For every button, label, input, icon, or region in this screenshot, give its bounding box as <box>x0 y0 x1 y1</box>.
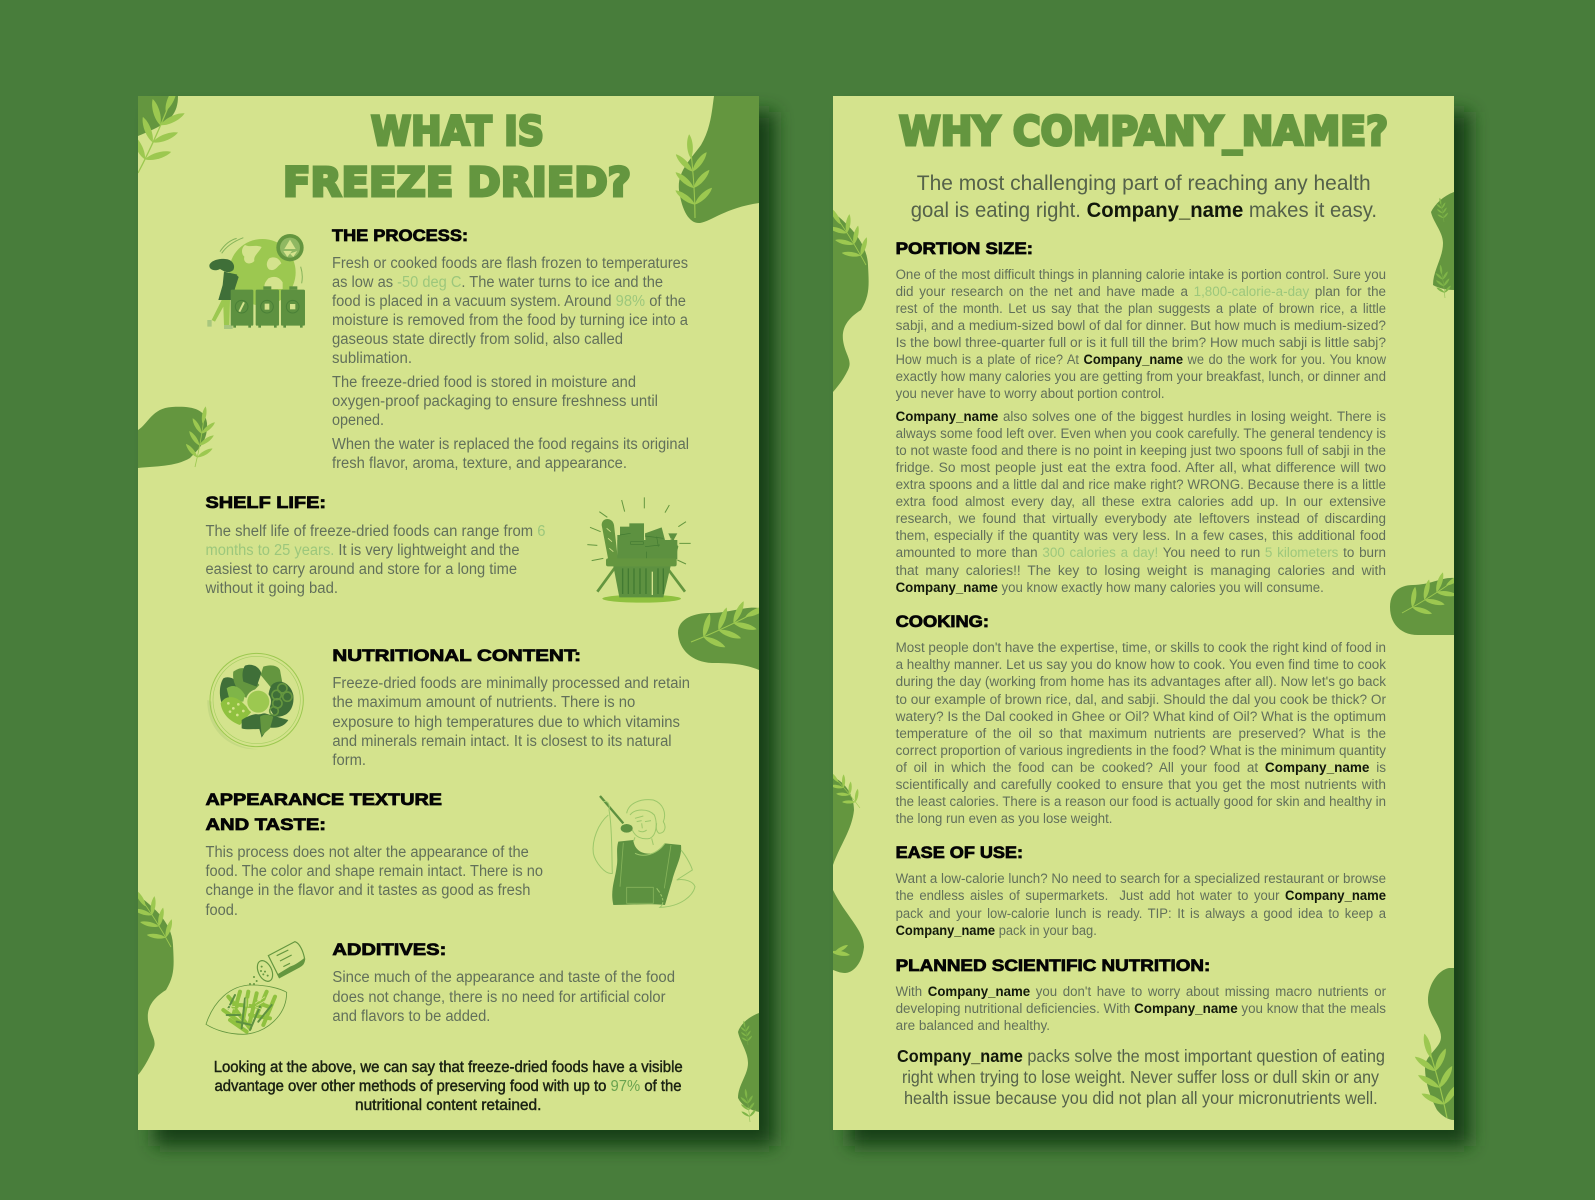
text block: nutritional content: form. <box>332 752 366 769</box>
heading: nutritional content: NUTRITIONAL CONTENT: <box>332 647 581 665</box>
text block: the process <box>332 255 689 472</box>
closing text: Company_name packs solve the most important question of eating <box>897 1046 1385 1066</box>
title: why company_name: WHY COMPANY_NAME? <box>899 109 1388 155</box>
text block: the process: food is placed in a vacuum system. Around 98% of the <box>332 293 686 310</box>
text block: nutritional content <box>332 675 690 769</box>
text block: portion size: How much is a plate of rice? At Company_name we do the work for you. You know <box>896 352 1386 367</box>
text block: ease of use: Want a low-calorie lunch? No need to search for a specialized restaurant or browse <box>896 871 1386 886</box>
heading: portion size: PORTION SIZE: <box>896 240 1033 258</box>
text block: the process: fresh flavor, aroma, texture, and appearance. <box>332 455 627 472</box>
heading: shelf life: SHELF LIFE: <box>206 494 326 512</box>
text block: portion size: always some food left over. Even when you cook carefully. The general tendency is <box>896 426 1386 441</box>
text block: the process: sublimation. <box>332 350 412 367</box>
text block: cooking: the long run even as you lose weight. <box>896 811 1112 826</box>
icon: grocery basket <box>587 497 691 603</box>
text block: additives: does not change, there is no need for artificial color <box>332 989 666 1006</box>
text block: appearance texture and taste: food. <box>206 902 238 919</box>
text block: planned scientific nutrition: developing nutritional deficiencies. With Company_name you know that the meals <box>896 1001 1386 1016</box>
text block: ease of use: pack and your low-calorie lunch is ready. TIP: It is always a good idea to keep a <box>896 906 1386 921</box>
icon: woman tasting from a ladle <box>593 796 695 907</box>
decorative blobs and leaves, right panel <box>817 192 1473 1123</box>
text block: portion size: did your research on the net and have made a 1,800-calorie-a-day plan for the <box>896 284 1386 299</box>
icon: salt shaker over a bowl of beans <box>206 942 305 1034</box>
text block: cooking: of oil in which the food can be cooked? All your food at Company_name is <box>896 760 1386 775</box>
text block: the process: The freeze-dried food is stored in moisture and <box>332 374 636 391</box>
decorative blobs and leaves, left panel <box>118 77 776 1123</box>
text block: portion size: you never have to worry about portion control. <box>896 386 1165 401</box>
text block: appearance texture and taste: This process does not alter the appearance of the <box>206 844 529 861</box>
heading: ease of use: EASE OF USE: <box>896 844 1023 862</box>
heading: the process: THE PROCESS: <box>332 227 468 245</box>
text block: planned scientific nutrition <box>896 984 1386 1033</box>
infographic canvas <box>138 96 1480 1156</box>
heading: appearance texture and taste <box>206 791 442 834</box>
text block: cooking: scientifically and carefully cooked to ensure that you get the most nutrients with <box>896 777 1386 792</box>
closing text <box>897 1046 1385 1108</box>
text block: portion size: extra spoons and a little dal and rice make right? WRONG. Because there is a little <box>896 477 1386 492</box>
text block: shelf life: easiest to carry around and store for a long time <box>206 561 517 578</box>
intro text <box>911 171 1377 222</box>
text block: the process: Fresh or cooked foods are flash frozen to temperatures <box>332 255 688 272</box>
panel: what is freeze dried <box>118 77 776 1130</box>
text block: nutritional content: and minerals remain intact. It is closest to its natural <box>332 733 672 750</box>
text block: cooking <box>895 640 1387 826</box>
text block: shelf life <box>205 523 545 597</box>
intro text: goal is eating right. Company_name makes it easy. <box>911 198 1377 222</box>
text block: planned scientific nutrition: are balanced and healthy. <box>896 1018 1050 1033</box>
text block: the process: as low as -50 deg C. The water turns to ice and the <box>332 274 663 291</box>
text block: portion size: to not waste food and there is no point in keeping just two spoons full of sabji in the <box>896 443 1386 458</box>
text block: ease of use <box>896 871 1386 938</box>
heading: additives: ADDITIVES: <box>332 941 446 959</box>
text block: shelf life: months to 25 years. It is very lightweight and the <box>206 542 520 559</box>
text block: cooking: during the day (working from home has its advantages after all). Now let's go back <box>896 674 1386 689</box>
conclusion: advantage over other methods of preserving food with up to 97% of the <box>214 1078 682 1095</box>
text block: portion size <box>896 267 1386 595</box>
text block: cooking: Most people don't have the expertise, time, or skills to cook the right kind of food in <box>896 640 1386 655</box>
text block: additives: Since much of the appearance and taste of the food <box>332 969 675 986</box>
text block: portion size: sabji, and a medium-sized bowl of dal for dinner. But how much is medium-sized? <box>896 318 1386 333</box>
icon: globe, recycling bins and woman <box>207 234 305 329</box>
conclusion <box>214 1059 683 1114</box>
text block: portion size: extra food almost every day, all these extra calories add up. In our extensive <box>896 494 1386 509</box>
conclusion: nutritional content retained. <box>355 1097 541 1114</box>
text block: ease of use: Company_name pack in your bag. <box>896 923 1097 938</box>
text block: portion size: fridge. So most people just eat the extra food. After all, what difference will two <box>896 460 1386 475</box>
panel: why company_name <box>817 96 1473 1130</box>
closing text: health issue because you did not plan all your micronutrients well. <box>904 1088 1378 1108</box>
heading: appearance texture and taste: AND TASTE: <box>206 816 326 834</box>
title: what is freeze dried: FREEZE DRIED? <box>283 160 631 206</box>
text block: additives <box>332 969 675 1025</box>
text block: portion size: Is the bowl three-quarter full or is it full till the brim? How much sabji is little sabj? <box>896 335 1386 350</box>
text block: portion size: that many calories!! The key to losing weight is managing calories and with <box>896 563 1386 578</box>
heading: planned scientific nutrition: PLANNED SCIENTIFIC NUTRITION: <box>896 957 1210 975</box>
text block: cooking: temperature of the oil so that maximum nutrients are preserved? What is the <box>896 726 1386 741</box>
text block: shelf life: The shelf life of freeze-dried foods can range from 6 <box>206 523 546 540</box>
text block: portion size: research, we found that virtually everybody ate leftovers instead of discarding <box>896 511 1386 526</box>
text block: the process: opened. <box>332 412 384 429</box>
text block: portion size: One of the most difficult things in planning calorie intake is portion control. Sure you <box>896 267 1386 282</box>
text block: appearance texture and taste <box>206 844 543 919</box>
text block: appearance texture and taste: change in the flavor and it tastes as good as fresh <box>206 882 530 899</box>
text block: cooking: correct proportion of various ingredients in the food? What is the minimum quantity <box>896 743 1386 758</box>
closing text: right when trying to lose weight. Never suffer loss or dull skin or any <box>902 1067 1379 1087</box>
text block: cooking: a healthy manner. Let us say you do know how to cook. You even find time to cook <box>896 657 1386 672</box>
icon: plate of greens <box>207 653 303 749</box>
title: what is freeze dried: WHAT IS <box>371 109 544 155</box>
text block: shelf life: without it going bad. <box>205 580 338 597</box>
text block: portion size: exactly how many calories you are getting from your breakfast, lunch, or dinner and <box>896 369 1386 384</box>
text block: portion size: them, especially if the quantity was very less. In a few cases, this additional food <box>896 528 1386 543</box>
text block: nutritional content: the maximum amount of nutrients. There is no <box>332 694 635 711</box>
text block: portion size: amounted to more than 300 calories a day! You need to run 5 kilometers to burn <box>896 545 1386 560</box>
text block: the process: oxygen-proof packaging to ensure freshness until <box>332 393 658 410</box>
text block: cooking: to our example of brown rice, dal, and sabji. Should the dal you cook be thick? Or <box>896 692 1387 707</box>
text block: nutritional content: exposure to high temperatures due to which vitamins <box>332 714 680 731</box>
text block: the process: gaseous state directly from solid, also called <box>332 331 623 348</box>
text block: portion size: Company_name you know exactly how many calories you will consume. <box>896 580 1324 595</box>
intro text: The most challenging part of reaching any health <box>917 171 1371 195</box>
text block: cooking: watery? Is the Dal cooked in Ghee or Oil? What kind of Oil? What is the optimum <box>895 709 1386 724</box>
text block: cooking: the least calories. There is a reason our food is actually good for skin and healthy in <box>896 794 1386 809</box>
heading: appearance texture and taste: APPEARANCE TEXTURE <box>206 791 442 809</box>
conclusion: Looking at the above, we can say that freeze-dried foods have a visible <box>214 1059 683 1076</box>
text block: planned scientific nutrition: With Company_name you don't have to worry about missing macro nutrients or <box>896 984 1386 999</box>
text block: portion size: Company_name also solves one of the biggest hurdles in losing weight. There is <box>896 409 1386 424</box>
title: what is freeze dried <box>283 109 631 206</box>
text block: nutritional content: Freeze-dried foods are minimally processed and retain <box>332 675 690 692</box>
heading: cooking: COOKING: <box>896 613 989 631</box>
text block: the process: moisture is removed from the food by turning ice into a <box>332 312 688 329</box>
text block: the process: When the water is replaced the food regains its original <box>332 436 689 453</box>
text block: portion size: rest of the month. Let us say that the plan suggests a plate of brown rice, a little <box>896 301 1386 316</box>
text block: ease of use: the endless aisles of supermarkets. Just add hot water to your Company_name <box>896 888 1386 903</box>
text block: appearance texture and taste: food. The color and shape remain intact. There is no <box>206 863 543 880</box>
text block: additives: and flavors to be added. <box>332 1008 490 1025</box>
